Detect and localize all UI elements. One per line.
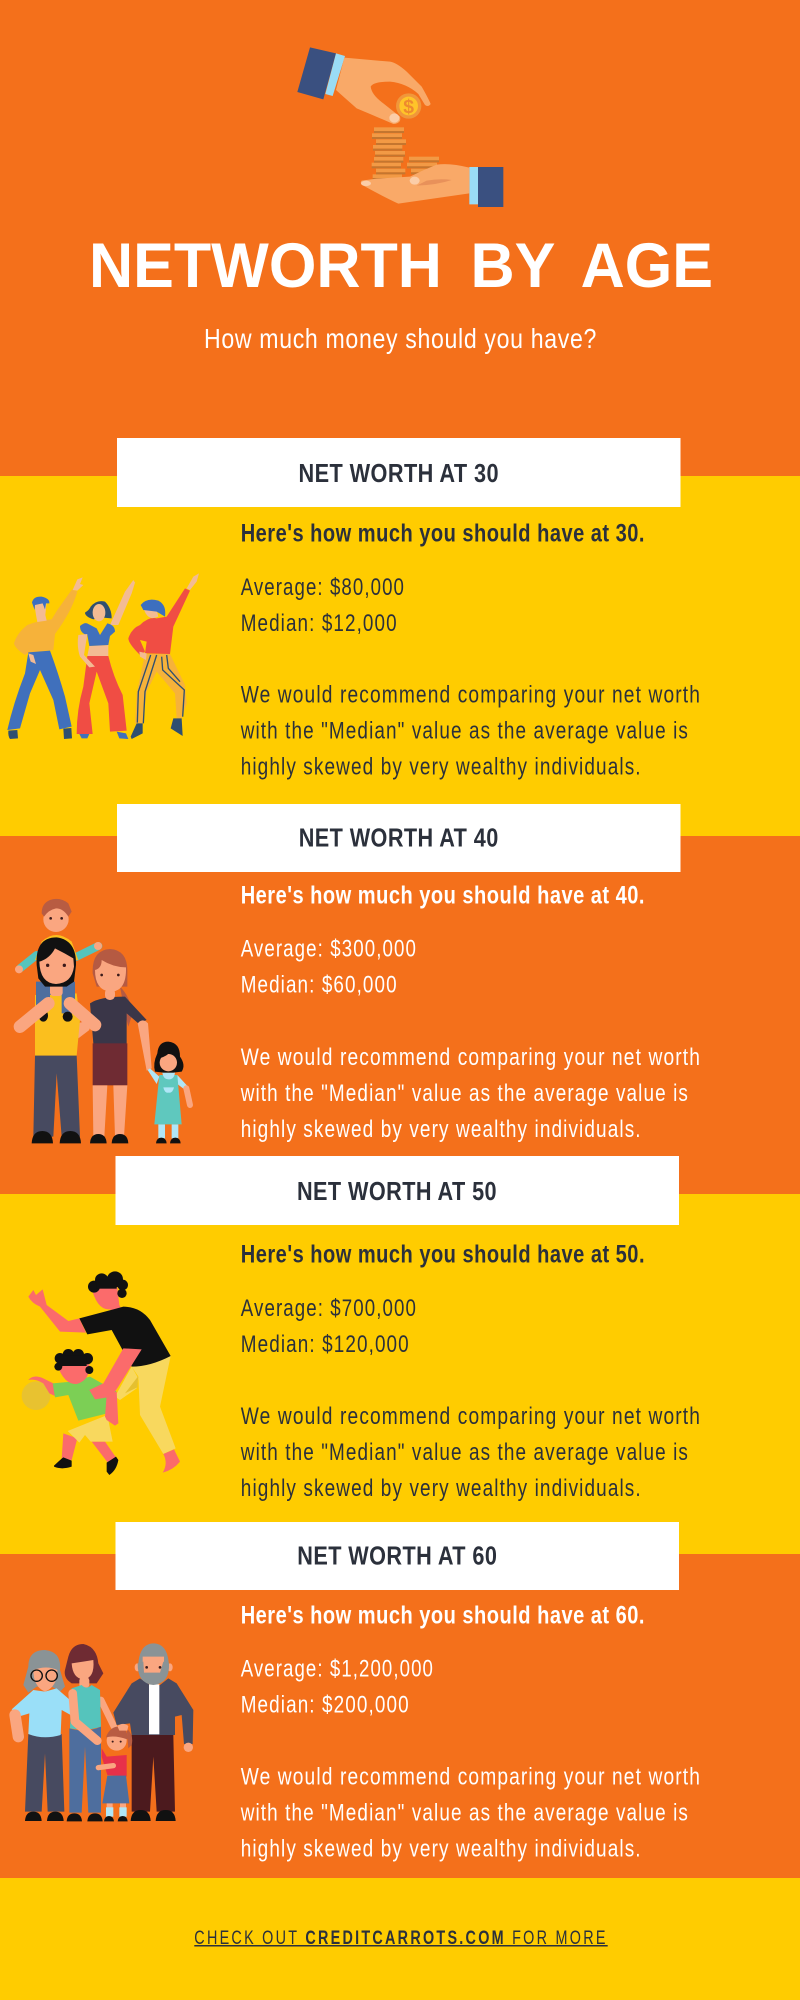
- text: figures 40: Average: $300,000: [241, 936, 417, 963]
- text: recommendation 30: with the "Median" value as the average value is: [240, 718, 689, 745]
- text: figures 30: [241, 574, 405, 637]
- text: figures 50: [241, 1295, 417, 1358]
- illustration: family of four: [15, 899, 190, 1143]
- text: figures 60: [241, 1656, 434, 1719]
- text: figures 30: Average: $80,000: [241, 574, 405, 601]
- panel: net worth at 40: [0, 804, 800, 1194]
- heading bar: 30: [117, 438, 680, 507]
- footer link text: CHECK OUT CREDITCARROTS.COM FOR MORE: [194, 1928, 608, 1949]
- panel: header: [0, 0, 800, 476]
- text: recommendation 40: with the "Median" value as the average value is: [240, 1080, 689, 1107]
- text: heading 60: Here's how much you should have at 60.: [241, 1602, 645, 1630]
- heading bar: 50: NET WORTH AT 50: [297, 1176, 497, 1206]
- text: recommendation 50: with the "Median" value as the average value is: [240, 1439, 689, 1466]
- text: recommendation 60: with the "Median" value as the average value is: [240, 1800, 689, 1827]
- text: recommendation 30: highly skewed by very wealthy individuals.: [241, 754, 642, 781]
- text: figures 40: [241, 936, 417, 999]
- panel: footer: [0, 1878, 800, 2000]
- heading bar: 30: NET WORTH AT 30: [298, 458, 499, 488]
- text: recommendation 50: [240, 1403, 701, 1502]
- text: recommendation 40: [240, 1044, 701, 1143]
- panel: net worth at 60: [0, 1522, 800, 1878]
- icon: hands and coins: [297, 47, 503, 207]
- text: recommendation 60: We would recommend comparing your net worth: [241, 1764, 701, 1791]
- text: recommendation 30: [240, 682, 701, 781]
- text: figures 60: Median: $200,000: [241, 1692, 410, 1719]
- subtitle: How much money should you have?: [204, 323, 597, 354]
- text: recommendation 40: We would recommend comparing your net worth: [241, 1044, 701, 1071]
- panel: net worth at 30: [0, 438, 800, 836]
- text: recommendation 40: highly skewed by very wealthy individuals.: [241, 1116, 642, 1143]
- illustration: three generations: [12, 1643, 193, 1821]
- text: recommendation 50: highly skewed by very wealthy individuals.: [241, 1475, 642, 1502]
- text: recommendation 60: [240, 1764, 701, 1863]
- text: recommendation 50: We would recommend comparing your net worth: [241, 1403, 701, 1430]
- icon: hands and coins: $: [403, 97, 414, 118]
- text: figures 40: Median: $60,000: [241, 972, 398, 999]
- heading bar: 60: [116, 1522, 679, 1590]
- heading bar: 50: [116, 1156, 679, 1225]
- text: heading 50: Here's how much you should have at 50.: [241, 1241, 645, 1269]
- panel: net worth at 50: [0, 1156, 800, 1554]
- title: NETWORTH BY AGE: [89, 231, 713, 301]
- heading bar: 40: [117, 804, 680, 872]
- text: recommendation 30: We would recommend comparing your net worth: [241, 682, 701, 709]
- text: figures 60: Average: $1,200,000: [241, 1656, 434, 1683]
- text: figures 50: Median: $120,000: [241, 1331, 410, 1358]
- heading bar: 60: NET WORTH AT 60: [297, 1541, 497, 1571]
- text: recommendation 60: highly skewed by very wealthy individuals.: [241, 1836, 642, 1863]
- heading bar: 40: NET WORTH AT 40: [299, 823, 499, 853]
- text: figures 30: Median: $12,000: [241, 610, 398, 637]
- text: heading 30: Here's how much you should have at 30.: [241, 520, 645, 548]
- text: figures 50: Average: $700,000: [241, 1295, 417, 1322]
- illustration: three dancers: [7, 573, 199, 739]
- text: heading 40: Here's how much you should have at 40.: [241, 882, 645, 910]
- illustration: father and son playing: [22, 1271, 180, 1475]
